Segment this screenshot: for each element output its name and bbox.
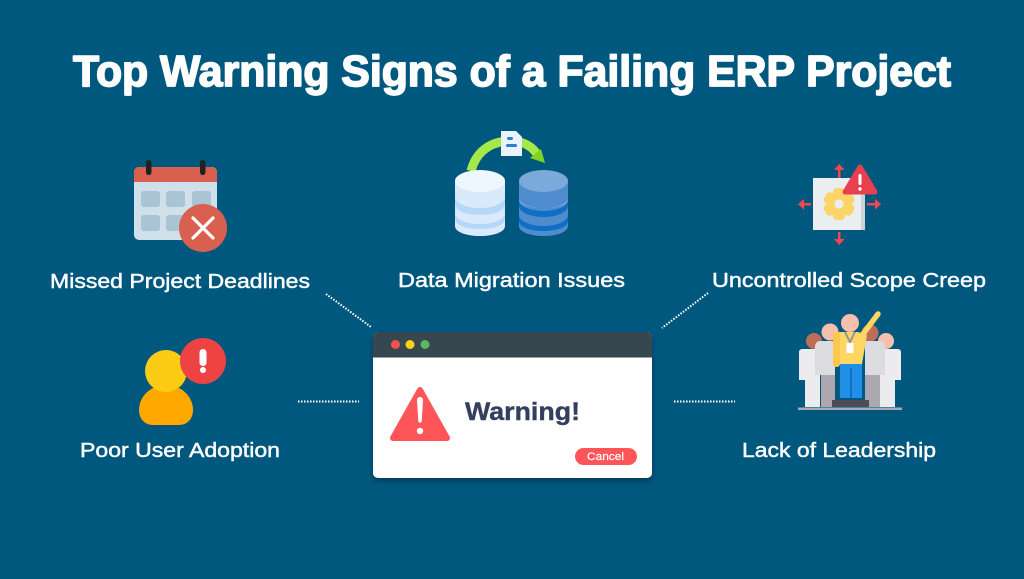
connector: leadership to warning [674, 400, 735, 402]
window title bar [373, 332, 652, 358]
icon: calendar with cross [134, 160, 227, 252]
item: uncontrolled scope creep [712, 164, 986, 292]
panel: warning dialog window [373, 332, 652, 478]
item: data migration issues [398, 131, 625, 292]
icon: database migration [455, 131, 568, 236]
connector: user adoption to warning [298, 400, 359, 402]
label: Lack of Leadership [742, 439, 936, 462]
title: Top Warning Signs of a Failing ERP Project [73, 47, 951, 96]
label: Uncontrolled Scope Creep [712, 269, 986, 292]
icon: warning triangle [393, 390, 447, 438]
item: poor user adoption [80, 338, 280, 462]
connector: scope creep to warning [662, 293, 708, 328]
item: missed project deadlines [50, 160, 310, 293]
icon: user with alert [139, 338, 226, 425]
label: Data Migration Issues [398, 269, 625, 292]
warning text: Warning! [465, 398, 580, 426]
cancel button [575, 448, 637, 465]
label: Poor User Adoption [80, 439, 280, 462]
icon: gear box with warning and arrows [798, 164, 881, 245]
window control dots [391, 340, 430, 349]
item: lack of leadership [742, 314, 936, 462]
label: Missed Project Deadlines [50, 270, 310, 293]
cancel button: Cancel [587, 451, 624, 463]
connector: missed deadlines to warning [326, 294, 371, 327]
icon: leader and team [798, 314, 902, 410]
